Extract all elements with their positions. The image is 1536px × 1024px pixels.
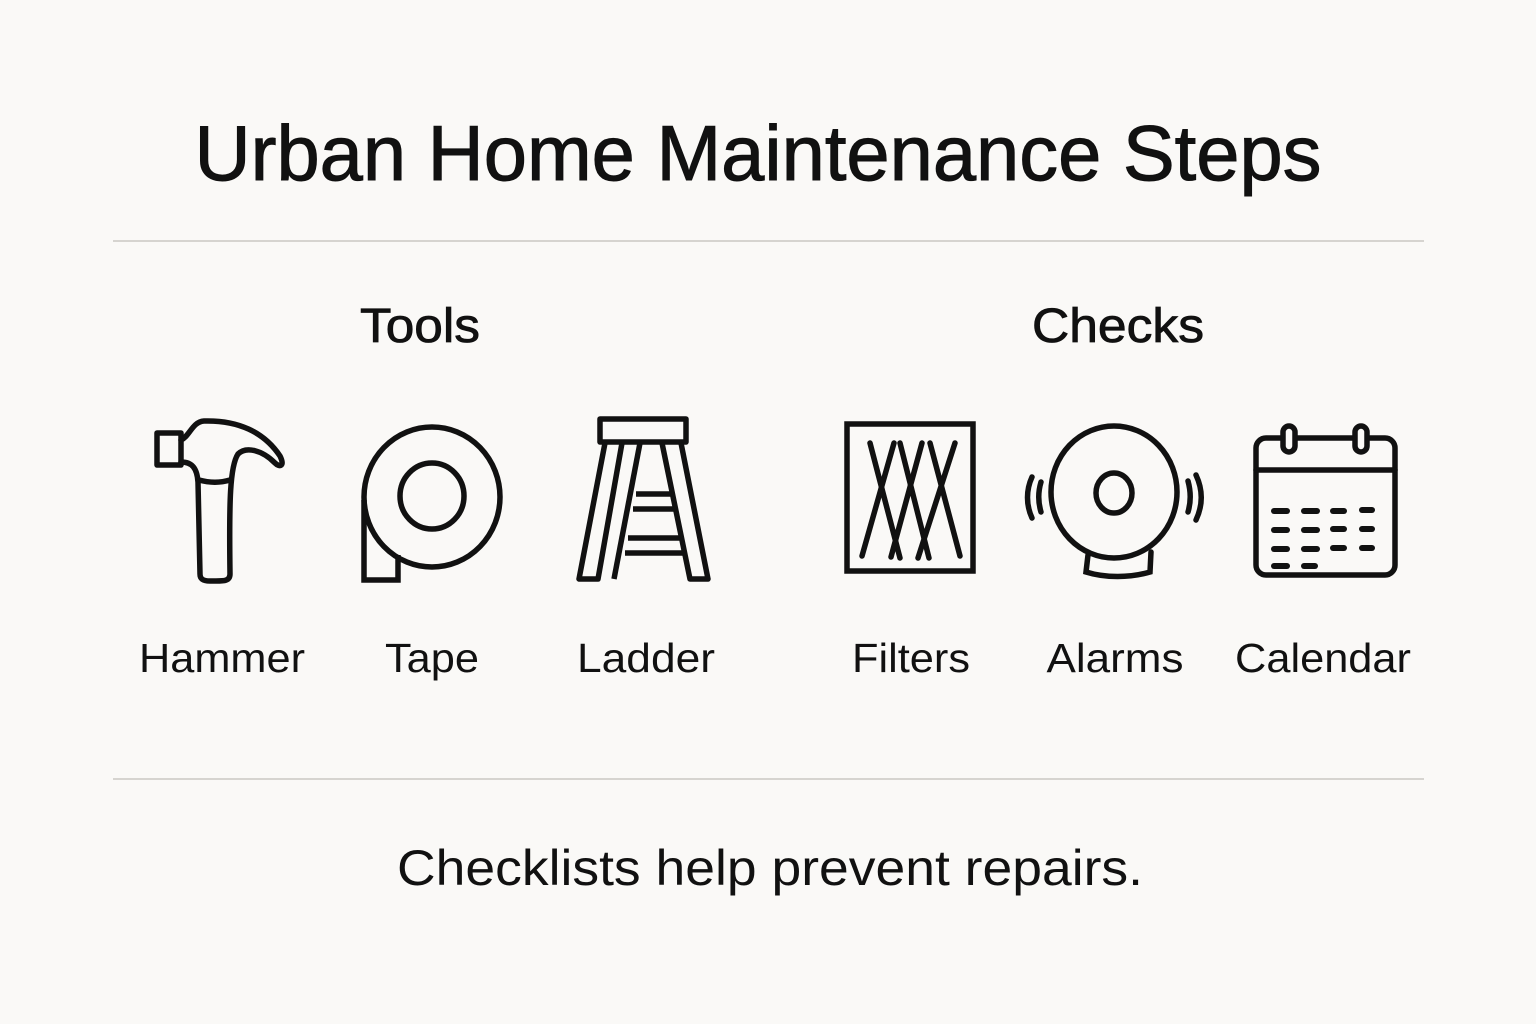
title: Urban Home Maintenance Steps xyxy=(194,109,1322,197)
label: filters: Filters xyxy=(852,635,970,681)
heading: tools: Tools xyxy=(360,300,480,353)
label: hammer: Hammer xyxy=(139,635,305,681)
label: ladder: Ladder xyxy=(577,635,715,681)
panel: tools xyxy=(139,300,715,681)
icon: tape xyxy=(364,427,500,580)
icon: filters xyxy=(847,424,973,571)
label: tape: Tape xyxy=(385,635,479,681)
footer text: Checklists help prevent repairs. xyxy=(397,840,1143,896)
heading: checks: Checks xyxy=(1032,300,1204,353)
icon: hammer xyxy=(157,421,282,581)
panel: checks xyxy=(847,300,1411,681)
icon: ladder xyxy=(579,419,708,579)
label: alarms: Alarms xyxy=(1046,635,1184,681)
label: calendar: Calendar xyxy=(1235,635,1411,681)
icon: calendar xyxy=(1256,426,1395,575)
icon: alarm xyxy=(1028,426,1201,576)
